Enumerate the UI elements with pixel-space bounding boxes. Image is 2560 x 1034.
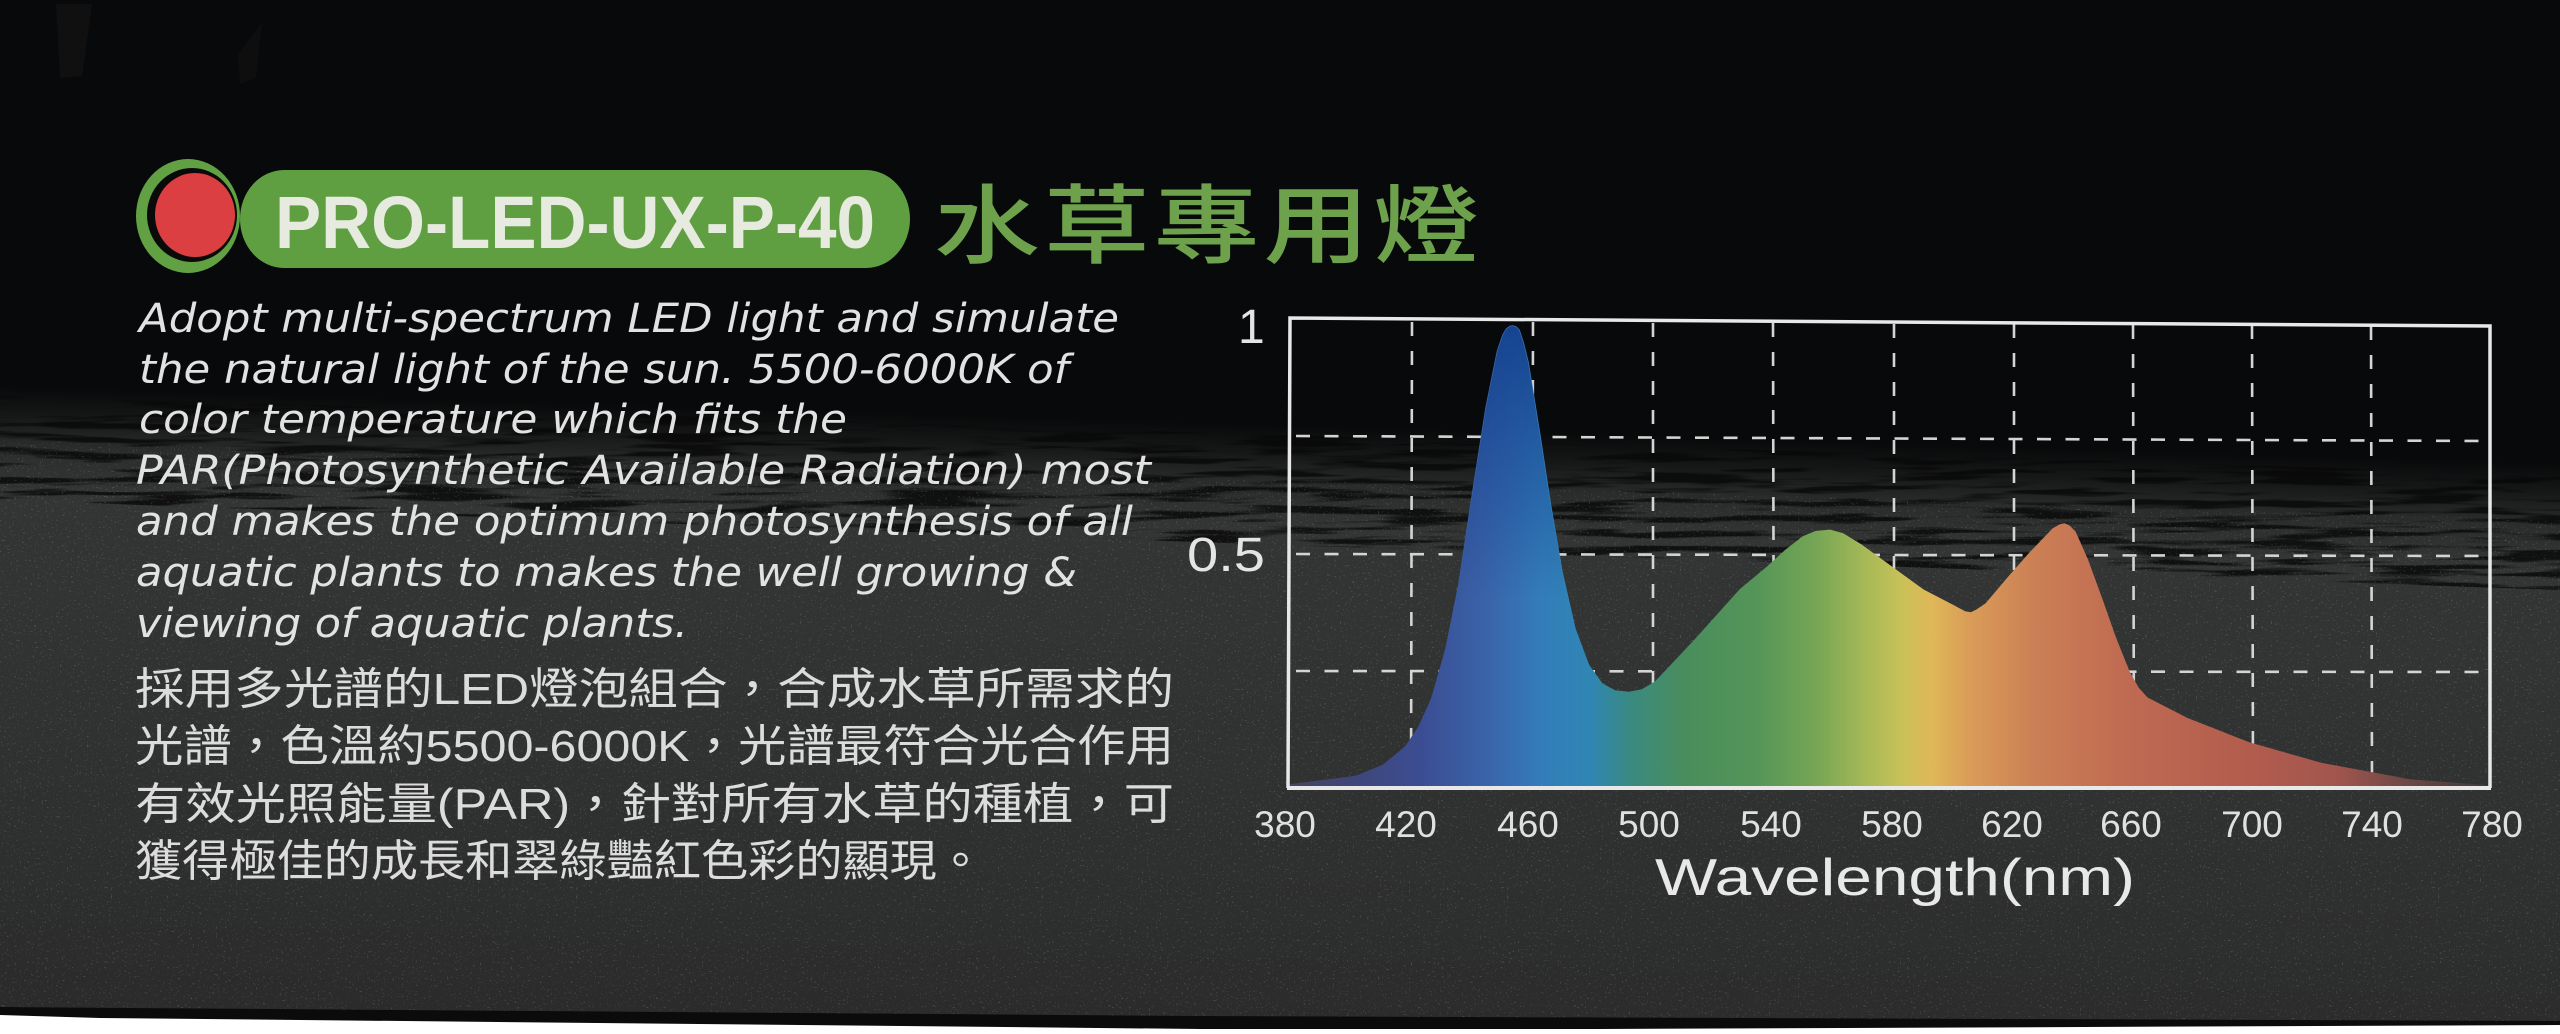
model name: PRO-LED-UX-P-40 [275,181,875,264]
x axis tick labels: 460 [1497,804,1559,845]
plot frame [1287,318,2491,788]
spectrum chart [1187,301,2523,907]
x axis tick labels: 700 [2221,804,2283,845]
spectrum curve [1289,326,2490,788]
green model pill [240,170,910,268]
x axis tick labels: 420 [1375,804,1437,845]
English description: the natural light of the sun. 5500-6000K of [139,347,1075,393]
x axis tick labels: 780 [2461,804,2523,845]
English description: and makes the optimum photosynthesis of all [136,499,1133,545]
x axis tick labels: 540 [1740,804,1802,845]
x axis tick labels: 380 [1254,804,1316,845]
x axis tick labels: 660 [2100,804,2162,845]
English description: color temperature which fits the [139,397,847,443]
y axis labels: 1 [1238,301,1265,354]
English description: aquatic plants to makes the well growing & [136,550,1077,596]
Chinese description: 有效光照能量(PAR)，針對所有水草的種植，可 [135,780,1174,829]
indicator ring with red light [136,159,240,273]
Chinese description: 光譜，色溫約5500-6000K，光譜最符合光合作用 [135,722,1174,771]
English description [136,296,1152,647]
English description: PAR(Photosynthetic Available Radiation) most [136,448,1152,494]
heading: aquatic plant lamp: 水草專用燈 [934,180,1479,275]
grid lines [1296,322,2488,785]
x axis title: Wavelength(nm) [1655,849,2135,907]
x axis tick labels: 740 [2341,804,2403,845]
y axis labels [1187,301,1265,582]
x axis tick labels [1254,804,2523,845]
Chinese description [135,665,1174,886]
Chinese description: 採用多光譜的LED燈泡組合，合成水草所需求的 [135,665,1174,714]
y axis labels: 0.5 [1187,529,1265,582]
x axis tick labels: 620 [1981,804,2043,845]
English description: viewing of aquatic plants. [136,601,688,647]
x axis tick labels: 500 [1618,804,1680,845]
model badge [136,159,910,273]
English description: Adopt multi-spectrum LED light and simulate [136,296,1119,342]
Chinese description: 獲得極佳的成長和翠綠豔紅色彩的顯現。 [135,837,984,886]
x axis tick labels: 580 [1861,804,1923,845]
